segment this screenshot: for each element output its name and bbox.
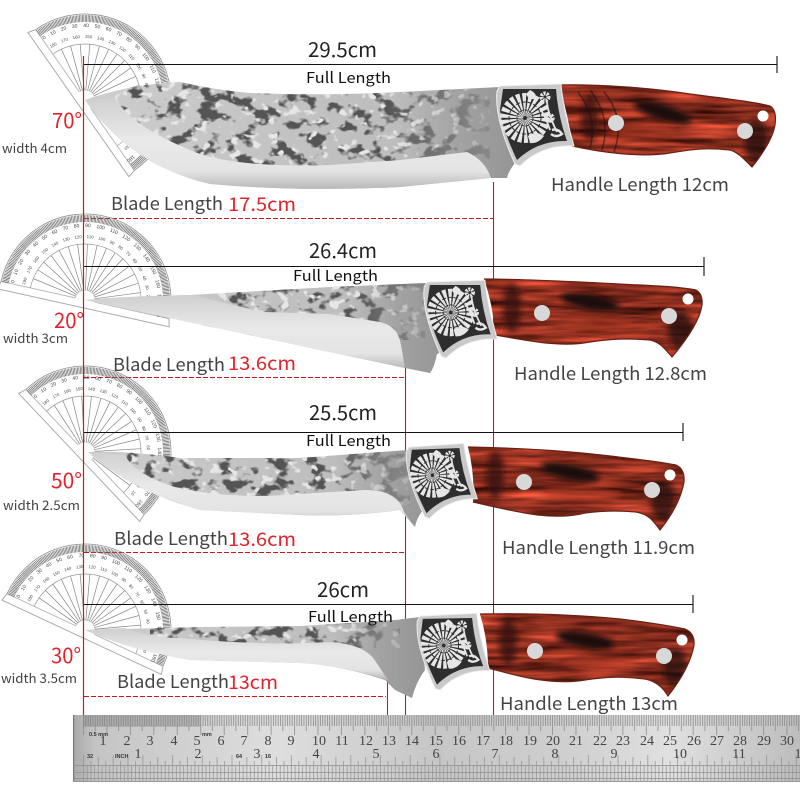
ruler inch numbers: 8 <box>552 747 558 762</box>
knife 3 labels: Handle Length 11.9cm <box>502 534 695 560</box>
panel: knife 4 <box>1 544 695 716</box>
panel: knife 2 <box>0 214 707 426</box>
ruler inch numbers: 4 <box>312 747 320 762</box>
ruler inch numbers: 5 <box>372 747 380 762</box>
ruler centimetre numbers: 11 <box>335 734 349 749</box>
protractor 3: 180 170 160 150 140 130 120 110 100 90 80 70 60 50 40 30 20 10 0 <box>42 387 150 496</box>
ruler inch numbers: 3 <box>254 747 260 762</box>
protractor 3: 0 10 20 30 40 50 60 70 80 90 100 110 120 130 140 150 160 170 180 <box>34 376 162 508</box>
knife 2 blade <box>85 280 445 373</box>
ruler inch numbers: mm <box>202 732 212 738</box>
ruler inch numbers: 32 <box>87 754 93 760</box>
ruler inch numbers: INCH <box>115 754 128 760</box>
knife 1 labels <box>2 34 729 217</box>
knife 4 labels <box>1 574 678 716</box>
knife 3 labels: Full Length <box>306 430 391 451</box>
knife 3 overall length line <box>84 423 683 441</box>
ruler centimetre numbers: 8 <box>264 734 272 749</box>
knife 2 labels: width 3cm <box>3 328 68 347</box>
ruler inch numbers: 7 <box>492 747 498 762</box>
ruler centimetre numbers: 22 <box>593 734 607 749</box>
knife 1 labels: 17.5cm <box>228 190 296 217</box>
knife 2 handle <box>484 278 703 358</box>
ruler centimetre numbers: 18 <box>499 734 513 749</box>
ruler inch numbers: 0.5 mm <box>89 732 108 738</box>
red datum line at the knife tips <box>82 56 84 715</box>
ruler centimetre numbers: 5 <box>194 734 200 749</box>
ruler centimetre numbers: 12 <box>359 734 373 749</box>
knife 1 labels: width 4cm <box>2 138 67 157</box>
ruler inch numbers: 10 <box>673 747 687 762</box>
ruler inch numbers <box>87 732 800 762</box>
knife 2 labels: 13.6cm <box>228 349 296 376</box>
knife 2 labels <box>3 235 707 386</box>
ruler inch numbers: 16 <box>265 754 271 760</box>
ruler centimetre numbers: 14 <box>405 734 419 749</box>
knife 1 labels: Blade Length <box>111 190 223 216</box>
knife 1 overall length line <box>84 56 777 73</box>
knife 3 labels: 50° <box>51 465 82 495</box>
protractor 2: 180 170 160 150 140 130 120 110 100 90 80 70 60 50 40 30 20 10 0 <box>22 235 150 296</box>
ruler centimetre numbers <box>100 734 794 749</box>
ruler centimetre numbers: 16 <box>452 734 466 749</box>
knife 4 blade <box>85 617 425 698</box>
knife 2 labels: 26.4cm <box>309 235 377 264</box>
knife 2 labels: Full Length <box>293 265 378 286</box>
ruler centimetre numbers: 27 <box>710 734 724 749</box>
knife 2 labels: Handle Length 12.8cm <box>514 360 707 386</box>
protractor 4: 0 10 20 30 40 50 60 70 80 90 100 110 120 130 140 150 160 170 180 <box>16 554 162 662</box>
protractor 1: 0 10 20 30 40 50 60 70 80 90 100 110 120 130 140 150 160 170 180 <box>42 24 160 162</box>
knife 1 blade <box>85 80 515 189</box>
knife 3 bolster <box>406 443 478 519</box>
knife 4 overall length line <box>84 595 693 613</box>
protractor 4: 180 170 160 150 140 130 120 110 100 90 80 70 60 50 40 30 20 10 0 <box>28 565 150 653</box>
ruler centimetre numbers: 10 <box>312 734 326 749</box>
ruler centimetre numbers: 30 <box>780 734 794 749</box>
knife 1 handle <box>562 84 776 168</box>
ruler centimetre numbers: 25 <box>663 734 677 749</box>
ruler centimetre numbers: 17 <box>476 734 490 749</box>
knife 4 labels: 13cm <box>228 668 278 695</box>
protractor 1: 180 170 160 150 140 130 120 110 100 90 80 70 60 50 40 30 20 10 0 <box>50 35 148 150</box>
knife 4 labels: Blade Length <box>117 668 229 694</box>
ruler centimetre numbers: 26 <box>687 734 701 749</box>
ruler inch numbers: 1 <box>134 747 142 762</box>
knife 3 labels <box>3 397 695 560</box>
knife 2 labels: Blade Length <box>113 351 225 377</box>
knife 3 blade <box>88 445 430 527</box>
ruler centimetre numbers: 13 <box>382 734 396 749</box>
ruler inch numbers: 11 <box>732 747 746 762</box>
ruler inch numbers: 64 <box>236 754 243 760</box>
knife 1 bolster <box>497 84 574 166</box>
ruler centimetre numbers: 15 <box>429 734 443 749</box>
ruler inch numbers: 6 <box>432 747 440 762</box>
knife 3 labels: Blade Length <box>114 525 228 551</box>
ruler centimetre numbers: 4 <box>170 734 178 749</box>
ruler <box>73 715 800 782</box>
knife 2 bolster <box>424 280 497 358</box>
knife 3 labels: 25.5cm <box>309 397 377 426</box>
knife 1 labels: Full Length <box>306 67 391 88</box>
ruler centimetre numbers: 21 <box>569 734 583 749</box>
panel: knife 1 <box>2 14 778 257</box>
ruler centimetre numbers: 20 <box>546 734 560 749</box>
ruler inch numbers: 2 <box>194 747 202 762</box>
ruler centimetre numbers: 2 <box>124 734 130 749</box>
knife 1 labels: 29.5cm <box>308 34 377 63</box>
panel: knife 3 <box>1 366 695 600</box>
knife 4 handle <box>480 613 695 697</box>
knife 4 labels: 30° <box>51 640 81 670</box>
knife 4 labels: width 3.5cm <box>1 668 77 687</box>
knife 3 labels: 13.6cm <box>228 525 296 552</box>
ruler centimetre numbers: 23 <box>616 734 630 749</box>
knife 3 labels: width 2.5cm <box>3 495 80 514</box>
ruler centimetre numbers: 9 <box>288 734 294 749</box>
ruler centimetre numbers: 28 <box>733 734 747 749</box>
knife 1 labels: 70° <box>52 105 82 135</box>
red measurement guide lines <box>84 182 494 715</box>
ruler centimetre numbers: 3 <box>146 734 154 749</box>
knife 4 labels: 26cm <box>317 574 369 603</box>
ruler centimetre numbers: 1 <box>100 734 106 749</box>
knife 4 bolster <box>417 613 490 691</box>
knife 4 labels: Full Length <box>308 606 393 627</box>
knife 1 labels: Handle Length 12cm <box>551 171 729 197</box>
protractor 2: 0 10 20 30 40 50 60 70 80 90 100 110 120 130 140 150 160 170 180 <box>10 224 162 316</box>
ruler centimetre numbers: 24 <box>640 734 654 749</box>
ruler centimetre numbers: 6 <box>218 734 224 749</box>
knife 2 labels: 20° <box>54 305 84 335</box>
ruler centimetre numbers: 29 <box>757 734 771 749</box>
knife 3 handle <box>464 443 688 533</box>
ruler inch numbers: 9 <box>610 747 618 762</box>
ruler centimetre numbers: 19 <box>523 734 537 749</box>
knife 2 overall length line <box>84 257 704 276</box>
knife 4 labels: Handle Length 13cm <box>500 690 678 716</box>
ruler centimetre numbers: 7 <box>240 734 248 749</box>
